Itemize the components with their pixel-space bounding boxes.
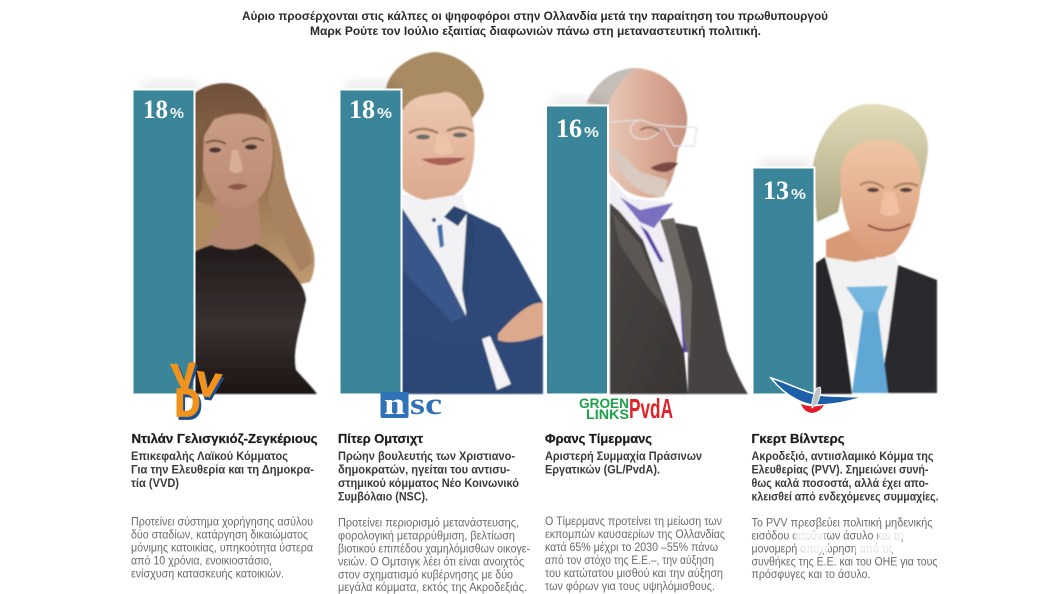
proposals: συνθήκες της Ε.Ε. και του ΟΗΕ για τους — [752, 556, 938, 568]
bar: 18%: % — [377, 105, 392, 122]
bar: 16% — [546, 98, 608, 394]
header: intro text: Μαρκ Ρούτε τον Ιούλιο εξαιτίας διαφωνιών πάνω στη μεταναστευτική πολιτική. — [310, 24, 761, 38]
bar: 18% — [340, 82, 402, 394]
logo: VVD: V — [195, 368, 224, 408]
header: intro text — [242, 9, 828, 38]
proposals: στον σχηματισμό κυβέρνησης με δύο — [338, 569, 513, 581]
logo: GroenLinks PvdA: GROEN — [579, 395, 629, 411]
proposals: από τον στόχο της Ε.Ε.–, την αύξηση — [545, 555, 714, 567]
logo: VVD: D — [175, 382, 200, 425]
role: Συμβόλαιο (NSC). — [338, 490, 428, 504]
role — [545, 449, 702, 476]
role: θως καλά ποσοστά, αλλά έχει απο- — [752, 476, 928, 490]
header: intro text: Αύριο προσέρχονται στις κάλπες οι ψηφοφόροι στην Ολλανδία μετά την παραίτηση του πρωθυπουργού — [242, 9, 828, 23]
role — [752, 449, 938, 504]
bar: 18%: 18 — [143, 95, 168, 124]
name: Φρανς Τίμερμανς — [545, 431, 652, 446]
role: Ακροδεξιό, αντιισλαμικό Κόμμα της — [752, 449, 934, 463]
proposals — [752, 517, 938, 581]
role: δημοκρατών, ηγείται του αντισυ- — [338, 462, 510, 476]
proposals: βιοτικού επιπέδου χαμηλόμισθων οικογε- — [338, 543, 530, 555]
logo: VVD: V — [171, 356, 198, 397]
proposals: από 10 χρόνια, ενοικιοστάσιο, — [131, 556, 272, 568]
logo: NSC: n — [384, 386, 405, 421]
proposals: φορολογική μεταρρύθμιση, βελτίωση — [338, 530, 515, 542]
logo: NSC: sc — [410, 386, 442, 421]
role: Ελευθερίας (PVV). Σημειώνει συνή- — [752, 462, 928, 476]
panel: Wilders — [752, 104, 938, 581]
logo: VVD: D — [177, 385, 202, 428]
portrait: Yesilgöz — [194, 83, 317, 394]
proposals: μεγάλα κόμματα, εκτός της Ακροδεξιάς. — [338, 582, 527, 594]
logo: GroenLinks PvdA: PvdA — [629, 393, 673, 424]
proposals — [131, 517, 313, 580]
proposals: εκπομπών καυσαερίων της Ολλανδίας — [545, 529, 725, 541]
role: Εργατικών (GL/PvdA). — [545, 462, 660, 476]
proposals: ενίσχυση κατασκευής κατοικιών. — [131, 568, 284, 580]
name: Πίτερ Ομτσιχτ — [338, 431, 423, 446]
logo: VVD: V — [194, 365, 223, 404]
role: κλεισθεί από ενδεχόμενες συμμαχίες. — [752, 490, 938, 504]
proposals — [545, 516, 725, 593]
portrait: Timmermans — [587, 68, 748, 394]
proposals: Ο Τίμερμανς προτείνει τη μείωση των — [545, 516, 722, 528]
proposals: Προτείνει περιορισμό μετανάστευσης, — [338, 517, 519, 529]
panel: Omtzigt — [338, 52, 543, 594]
proposals: πρόσφυγες και το άσυλο. — [752, 569, 870, 581]
proposals: μόνιμης κατοικίας, υπηκοότητα ύστερα — [131, 543, 313, 555]
proposals: μονομερή αποχώρηση από τις — [752, 543, 894, 555]
logo: GroenLinks PvdA: LINKS — [586, 406, 629, 422]
bar: 13%: % — [791, 186, 806, 203]
proposals — [338, 517, 530, 594]
panel: Yesilgöz — [131, 82, 318, 580]
role — [338, 449, 519, 504]
proposals: του κατώτατου μισθού και την αύξηση — [545, 568, 723, 580]
name: Γκερτ Βίλντερς — [752, 431, 845, 446]
role: στημικού κόμματος Νέο Κοινωνικό — [338, 476, 519, 490]
bar: 13%: 13 — [763, 176, 789, 205]
role: Επικεφαλής Λαϊκού Κόμματος — [131, 449, 288, 463]
proposals: Προτείνει σύστημα χορήγησης ασύλου — [131, 517, 313, 529]
role: Αριστερή Συμμαχία Πράσινων — [545, 449, 702, 463]
logo: VVD — [171, 356, 224, 428]
bar: 13% — [752, 160, 814, 394]
portrait: Omtzigt — [386, 52, 543, 394]
proposals: δύο σταδίων, κατάργηση δικαιώματος — [131, 530, 308, 542]
role: Πρώην βουλευτής των Χριστιανο- — [338, 449, 515, 463]
proposals: Το PVV πρεσβεύει πολιτική μηδενικής — [752, 517, 933, 529]
panel: Timmermans — [545, 68, 748, 593]
role — [131, 449, 314, 490]
proposals: των φόρων για τους υψηλόμισθους. — [545, 581, 715, 593]
name: Ντιλάν Γελισγκιόζ-Ζεγκέριους — [132, 431, 318, 446]
bar: 18% — [132, 82, 198, 394]
role: Για την Ελευθερία και τη Δημοκρα- — [131, 462, 314, 476]
logo: VVD: V — [173, 359, 200, 400]
logo: NSC — [380, 386, 442, 421]
proposals: κατά 65% μέχρι το 2030 –55% πάνω — [545, 542, 718, 554]
bar: 16%: % — [584, 124, 599, 141]
bar: 18%: 18 — [349, 95, 375, 124]
proposals: εισόδου αιτούντων άσυλο και τη — [752, 530, 904, 542]
bar: 18%: % — [170, 105, 184, 122]
portrait: Wilders — [813, 104, 937, 394]
proposals: νειών. Ο Ομτσιγκ λέει ότι είναι ανοιχτός — [338, 556, 524, 568]
logo: PVV seagull — [771, 378, 863, 413]
logo: GroenLinks PvdA — [579, 393, 673, 424]
role: τία (VVD) — [131, 476, 179, 490]
bar: 16%: 16 — [556, 114, 582, 143]
